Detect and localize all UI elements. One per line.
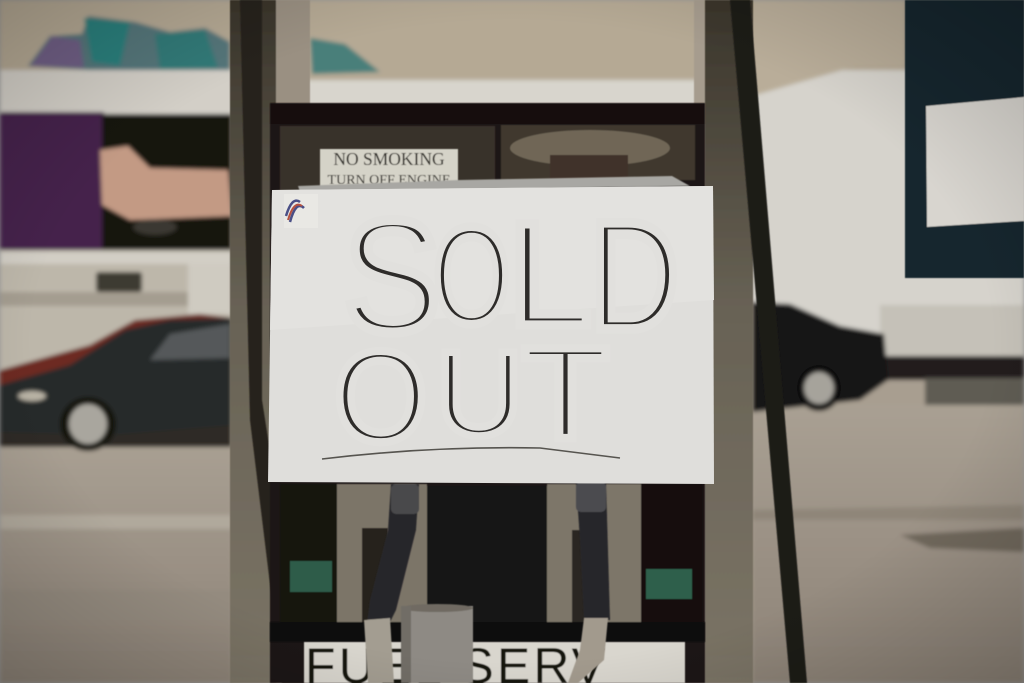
right nozzle hose bbox=[568, 482, 610, 683]
graffiti bbox=[28, 16, 380, 74]
right wall bbox=[752, 70, 1024, 360]
handwriting: SOLD: D bbox=[590, 190, 679, 362]
pump right post bbox=[705, 0, 753, 683]
green sticker right bbox=[646, 569, 692, 599]
pump left post bbox=[230, 0, 706, 683]
blue sign board bbox=[905, 0, 1024, 278]
pump body bbox=[270, 103, 705, 683]
handwriting: SOLD: L bbox=[508, 193, 591, 357]
billboard bbox=[0, 112, 232, 251]
handwriting: OUT bbox=[334, 320, 609, 469]
tape bbox=[298, 176, 690, 192]
handwriting: OUT: O bbox=[334, 325, 427, 469]
red car bbox=[0, 314, 232, 400]
green sticker left bbox=[290, 561, 332, 592]
lower pump panels bbox=[270, 484, 705, 642]
white band left bbox=[0, 70, 240, 114]
handwriting: SOLD bbox=[344, 188, 679, 366]
white paper on sign bbox=[926, 97, 1024, 227]
no smoking sign bbox=[320, 149, 458, 188]
handwritten underline bbox=[322, 448, 620, 459]
pale wall under billboard bbox=[0, 250, 232, 370]
dark ledge right bbox=[880, 356, 1024, 380]
no smoking sign: TURN OFF ENGINE bbox=[328, 173, 450, 188]
upper wall bbox=[0, 0, 905, 82]
paper sign bbox=[268, 186, 714, 484]
sticker logo bbox=[284, 194, 318, 228]
dark car left bbox=[0, 318, 232, 435]
metal bollard bbox=[401, 604, 473, 683]
left dark strap bbox=[240, 0, 306, 683]
shadow under left car bbox=[0, 425, 232, 447]
no smoking sign: NO SMOKING bbox=[333, 149, 445, 169]
handwriting: SOLD: S bbox=[344, 188, 440, 366]
handwriting: OUT: U bbox=[436, 327, 523, 461]
metal plate bbox=[501, 125, 695, 180]
left nozzle hose bbox=[364, 484, 419, 683]
handwriting: SOLD: O bbox=[433, 199, 510, 353]
diagonal dark strap bbox=[730, 0, 807, 683]
dark car right bbox=[752, 302, 888, 412]
handwriting: OUT: T bbox=[522, 320, 609, 466]
ground bbox=[0, 440, 232, 683]
